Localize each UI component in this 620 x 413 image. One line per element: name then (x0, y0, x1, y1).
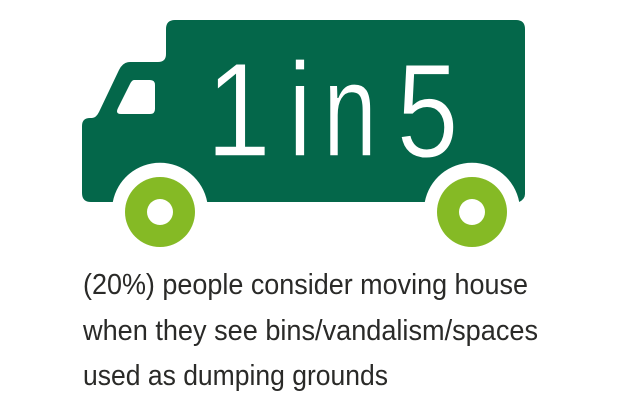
left wheel (125, 177, 195, 247)
right wheel (437, 177, 507, 247)
statistic: 1 in 5: 5 (396, 37, 458, 186)
caption text (82, 269, 538, 392)
truck infographic (82, 20, 525, 247)
caption text: (20%) people consider moving house (83, 269, 528, 301)
truck window (117, 80, 155, 114)
statistic: 1 in 5 (206, 36, 458, 186)
truck body (82, 20, 525, 202)
statistic: 1 in 5: 1 (206, 36, 271, 185)
statistic: 1 in 5: n (323, 36, 377, 185)
statistic: 1 in 5: i (288, 36, 312, 185)
caption text: when they see bins/vandalism/spaces (82, 315, 538, 347)
caption text: used as dumping grounds (83, 360, 388, 392)
